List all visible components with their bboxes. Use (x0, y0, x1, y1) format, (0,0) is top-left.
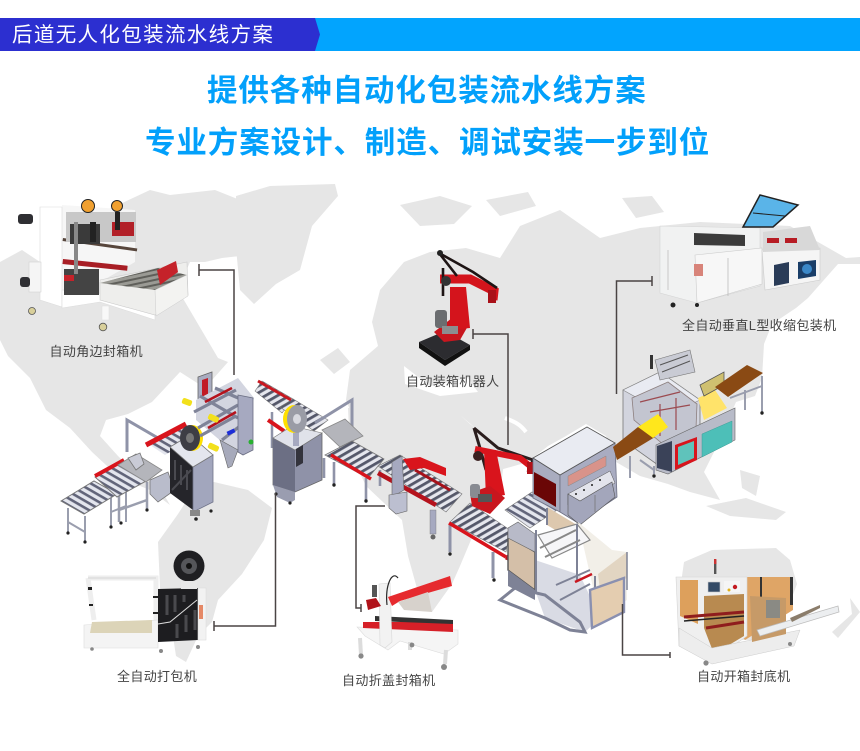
leader line: box erector (622, 604, 670, 658)
map: Mediterranean gaps (404, 366, 486, 436)
left outfeed roller table (61, 481, 126, 544)
leader line: strapping machine (214, 493, 276, 631)
L sealer on line (613, 350, 764, 478)
product: box erector (676, 559, 839, 666)
map: Australia (680, 548, 797, 640)
upper conveyor (255, 381, 328, 448)
labels (50, 318, 836, 688)
folder red arm (388, 576, 452, 606)
lower conveyor (448, 492, 560, 582)
erector chute (757, 606, 839, 636)
strapper black panel (158, 588, 198, 642)
second roller table with red rail (95, 453, 172, 525)
strapping station one (127, 420, 213, 521)
product: packing robot (419, 250, 497, 366)
title line 1: 提供各种自动化包装流水线方案 (207, 74, 647, 108)
robot base (419, 331, 470, 360)
shrink tunnel (533, 427, 617, 525)
label: box erector: 自动开箱封底机 (697, 669, 790, 684)
map: arctic islands (320, 192, 664, 374)
product: corner sealer (18, 200, 188, 331)
L sealer base cabinet (656, 408, 735, 474)
strap coil (174, 550, 204, 582)
corner sealer body (40, 207, 62, 307)
leader line: shrink machine (616, 276, 652, 394)
strapper frame (88, 578, 156, 620)
leader line: flap folder (356, 506, 385, 612)
shrink tunnel body (660, 226, 760, 303)
header label tab (0, 18, 320, 51)
robot body (434, 318, 468, 342)
infeed brown conveyor (613, 427, 655, 460)
label: corner sealer: 自动角边封箱机 (50, 344, 143, 359)
leader line: packing robot (473, 329, 508, 445)
casters (28, 308, 36, 314)
strapping station two (273, 400, 352, 505)
product: L sealer and shrink machine (660, 195, 820, 308)
corner sealer centre module (181, 372, 254, 468)
erector rear wood panels (720, 577, 793, 640)
corner sealer white backing (62, 205, 135, 290)
label: flap folder: 自动折盖封箱机 (342, 673, 435, 688)
folder base (357, 627, 458, 654)
erector base (679, 628, 800, 664)
blue lid (743, 195, 798, 227)
map: South America (158, 482, 272, 662)
label: packing robot: 自动装箱机器人 (406, 374, 499, 389)
tape rolls (82, 200, 94, 212)
strapper right column (198, 588, 206, 640)
production line (61, 350, 764, 632)
erector frame (676, 577, 747, 662)
header text: 后道无人化包装流水线方案 (12, 24, 274, 47)
header bar (0, 18, 860, 51)
folder column (379, 583, 392, 648)
erector control panel (708, 582, 720, 592)
map: North America (0, 190, 240, 505)
product: flap folding sealer (357, 576, 458, 670)
title line 2: 专业方案设计、制造、调试安装一步到位 (145, 126, 710, 160)
map: Southeast Asia islands (706, 470, 786, 520)
sealer unit (762, 248, 820, 290)
map: Greenland (236, 184, 338, 304)
main title (145, 74, 710, 160)
leader line: corner sealer (199, 264, 234, 375)
label: strapping machine: 全自动打包机 (117, 669, 197, 684)
world map background (0, 184, 860, 662)
folder red band (363, 622, 453, 632)
flap folder on line (378, 455, 462, 540)
product: strapping machine (84, 550, 206, 653)
label: shrink machine: 全自动垂直L型收缩包装机 (682, 318, 836, 333)
box erector cell on line (500, 507, 627, 632)
palletizing robot on line (470, 428, 535, 514)
map: New Zealand (832, 598, 860, 638)
middle conveyor (322, 419, 384, 503)
map: Europe Asia (346, 210, 860, 500)
map: Africa (348, 402, 504, 612)
robot arm (440, 279, 494, 300)
